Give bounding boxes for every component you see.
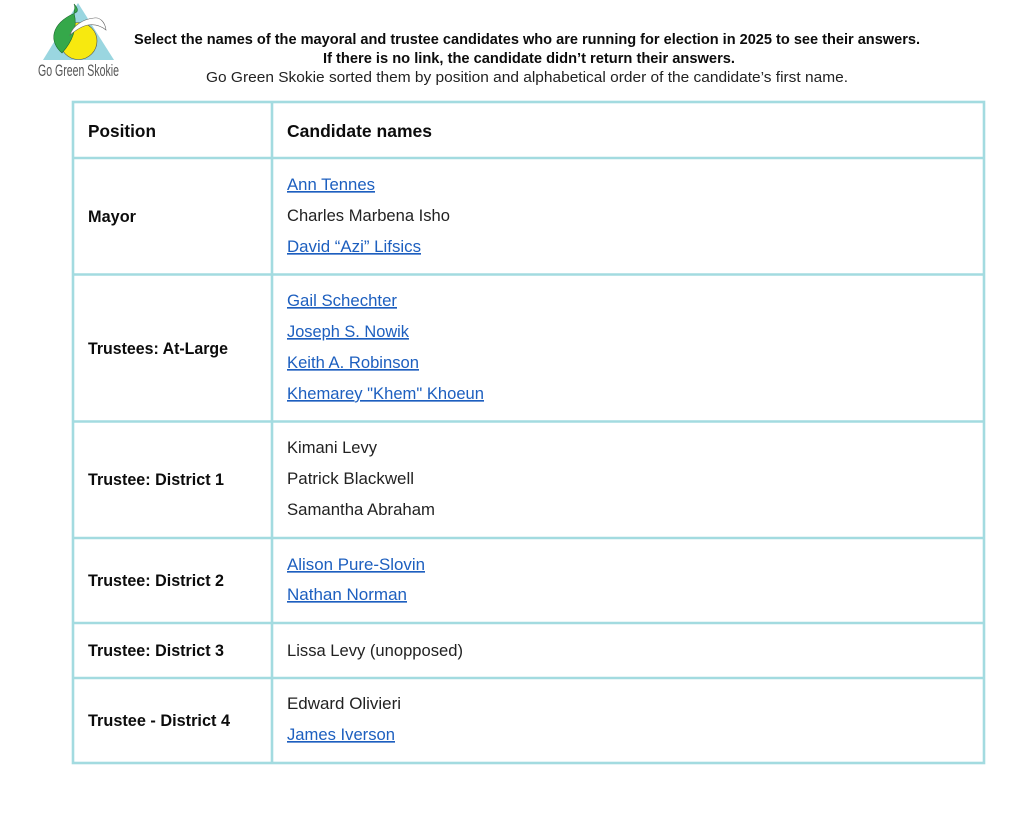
heading text: Go Green Skokie sorted them by position and alphabetical order of the candidate’s first name.: [206, 69, 848, 86]
row: District 3: [88, 642, 463, 660]
row: Mayor: Ann Tennes: [287, 176, 375, 194]
heading text: [134, 31, 920, 86]
row: District 1: Samantha Abraham: [287, 501, 435, 519]
header row: Candidate names: [287, 121, 432, 141]
row: District 1: Kimani Levy: [287, 439, 378, 457]
row: District 1: [88, 439, 435, 519]
table: [73, 102, 984, 763]
row: Trustees At-Large: Khemarey "Khem" Khoeun: [287, 385, 484, 403]
logo: Go Green Skokie: [38, 3, 119, 80]
row: District 3: Lissa Levy (unopposed): [287, 642, 463, 660]
header row: Position: [88, 121, 156, 141]
row: District 3: Trustee: District 3: [88, 642, 224, 660]
row: Trustees At-Large: Gail Schechter: [287, 292, 398, 310]
row: Mayor: [88, 176, 450, 256]
header row: [88, 121, 432, 141]
row: District 4: Trustee - District 4: [88, 712, 231, 730]
row: Trustees At-Large: [88, 292, 484, 403]
row: Mayor: David “Azi” Lifsics: [287, 238, 421, 256]
row: District 2: [88, 556, 425, 604]
row: District 2: Nathan Norman: [287, 586, 407, 604]
row: Trustees At-Large: Joseph S. Nowik: [287, 323, 410, 341]
heading text: If there is no link, the candidate didn’t return their answers.: [323, 50, 735, 67]
row: Mayor: Charles Marbena Isho: [287, 207, 450, 225]
table grid: [73, 102, 984, 763]
row: District 2: Alison Pure-Slovin: [287, 556, 425, 574]
logo: Go Green Skokie: Go Green Skokie: [38, 61, 119, 80]
row: District 2: Trustee: District 2: [88, 572, 224, 590]
row: District 1: Trustee: District 1: [88, 471, 224, 489]
row: District 4: [88, 695, 401, 744]
row: Trustees At-Large: Trustees: At-Large: [88, 340, 228, 358]
row: Mayor: Mayor: [88, 208, 137, 226]
heading text: Select the names of the mayoral and trustee candidates who are running for election in 2025 to see their answers.: [134, 31, 920, 48]
row: District 4: Edward Olivieri: [287, 695, 401, 713]
row: District 4: James Iverson: [287, 726, 395, 744]
row: District 1: Patrick Blackwell: [287, 470, 414, 488]
row: Trustees At-Large: Keith A. Robinson: [287, 354, 419, 372]
